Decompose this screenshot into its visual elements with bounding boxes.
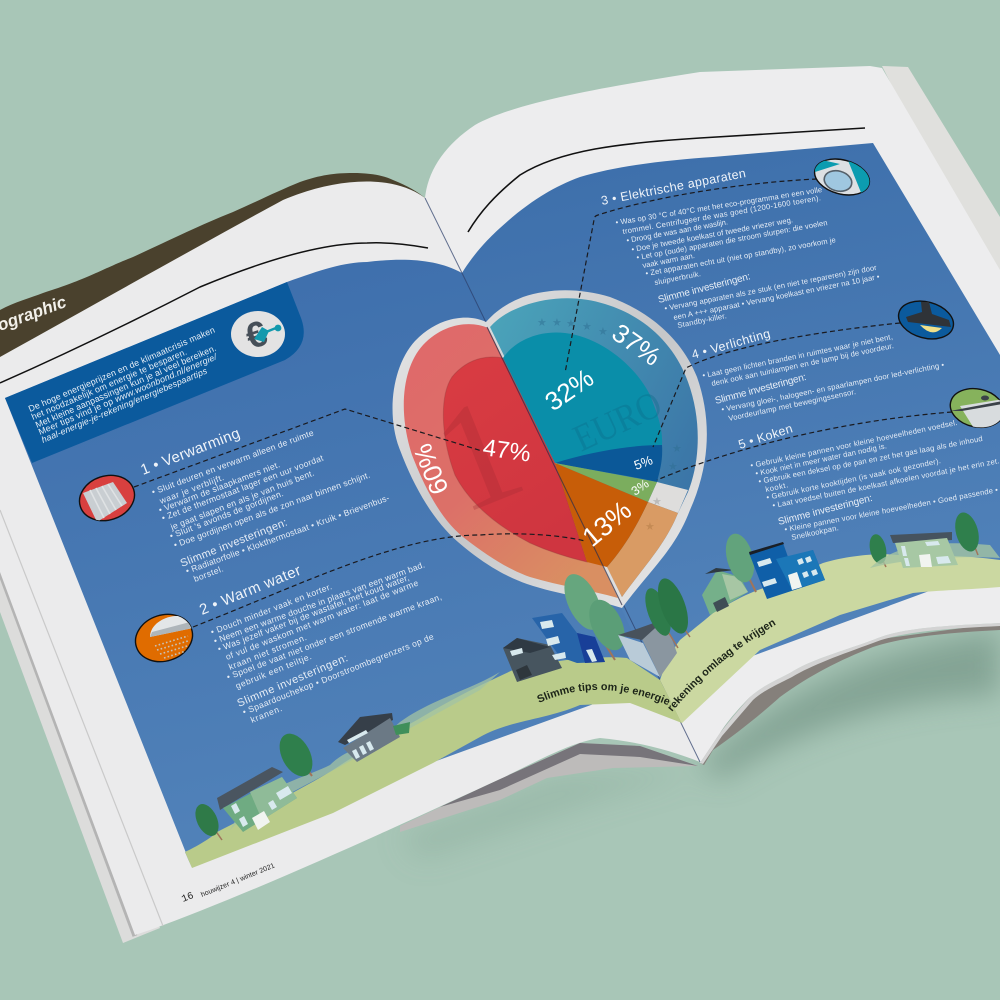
right page xyxy=(425,66,1000,763)
stars and rain watermark xyxy=(537,317,682,533)
icon: cooking pot xyxy=(950,388,1000,428)
stars and rain watermark: ★ xyxy=(668,461,678,473)
ground caption right: rekening omlaag te krijgen xyxy=(668,620,776,712)
slice: 47% red xyxy=(443,357,587,562)
tips text: • Let op (oude) apparaten die stroom slurpen: die voelen xyxy=(636,218,828,262)
tips text: kraan niet stromen. xyxy=(227,632,308,672)
section 2: warm water xyxy=(129,560,443,725)
tips text: • Was op 30 °C of 40°C met het eco-programma en een volle xyxy=(615,185,823,227)
tree small left xyxy=(191,800,223,840)
blue banner panel xyxy=(5,282,304,463)
blue apartment xyxy=(532,613,605,663)
dashed leader: koken xyxy=(657,412,952,480)
slice: 13% orange xyxy=(555,463,648,567)
tips text: een A +++ apparaat • Vervang koelkast en vriezer na 10 jaar • xyxy=(673,272,881,322)
icon: washing machine xyxy=(814,158,870,196)
icon: euro plug xyxy=(231,311,285,357)
tips text: • Sluit 's avonds de gordijnen. xyxy=(168,488,285,541)
tips text: • Gebruik kleine pannen voor kleine hoeveelheden voedsel. xyxy=(750,418,958,470)
tips text: Slimme investeringen: xyxy=(179,517,289,570)
heading: 1 • Verwarming xyxy=(138,425,242,479)
bushes xyxy=(230,672,500,830)
banner intro text: Meer tips vind je op www.woonbond.nl/energie/ xyxy=(37,351,220,437)
tips text: • Was jezelf vaker bij de wastafel, met koud water, xyxy=(216,572,411,654)
heart pie chart xyxy=(393,290,707,608)
section 4: verlichting xyxy=(690,295,958,423)
stars and rain watermark: ★ xyxy=(620,331,630,343)
label 13%: 13% xyxy=(577,495,637,553)
stars and rain watermark: ★ xyxy=(652,496,662,508)
tips text: denk ook aan tuinlampen en de lamp bij de voordeur. xyxy=(711,341,894,388)
tips text: • Spaardouchekop • Doorstroombegrenzers op de xyxy=(241,631,435,717)
tips text: of vul de waskom met warm water: laat de warme xyxy=(224,578,420,662)
heading: 2 • Warm water xyxy=(197,562,303,619)
tips text: kranen. xyxy=(249,703,283,725)
tips text: • Zet de thermostaat lager een uur voordat xyxy=(160,453,325,523)
euro note watermark: 1 xyxy=(412,364,544,546)
tips text: trommel. Centrifugeer de was goed (1200-1600 toeren). xyxy=(622,193,821,236)
dashed leader: elektrische apparaten xyxy=(565,179,817,373)
stars and rain watermark: ★ xyxy=(537,317,547,329)
label 60%: 60% xyxy=(407,439,455,499)
landscape left page xyxy=(191,568,694,840)
right page ground xyxy=(660,554,1000,723)
tips text: • Laat geen lichten branden in ruimtes waar je niet bent, xyxy=(702,332,893,380)
tips text: gebruik een teiltje. xyxy=(234,651,313,691)
stars and rain watermark: ★ xyxy=(645,521,655,533)
heading: 4 • Verlichting xyxy=(690,326,772,362)
left page xyxy=(0,182,700,935)
tips text xyxy=(702,332,945,423)
section 3: elektrische apparaten xyxy=(600,153,881,330)
tips text: Slimme investeringen: xyxy=(657,271,752,306)
tips text: • Gebruik korte kooktijden (is vaak ook gezonder). xyxy=(766,456,942,502)
banner intro text: Met kleine aanpassingen kun je al veel bereiken. xyxy=(34,343,218,430)
tips text: • Radiatorfolie • Klokthermostaat • Kruik • Brievenbus- xyxy=(184,493,391,576)
landscape right page xyxy=(702,510,1000,615)
tree xyxy=(721,530,759,592)
tips text: vaak warm aan. xyxy=(642,251,695,270)
banner intro text: haal-energie-je-rekening/energiebespaartips xyxy=(40,365,209,445)
label 3%: 3% xyxy=(629,477,652,498)
tips text: • Kleine pannen voor kleine hoeveelheden • Goed passende • xyxy=(784,485,999,534)
outer ring right: 37% xyxy=(490,298,698,597)
shadow under magazine xyxy=(400,630,1000,860)
tips text: • Laat voedsel buiten de koelkast afkoelen voordat je het erin zet. xyxy=(772,456,1000,510)
tips text: Slimme investeringen: xyxy=(714,372,808,407)
label 32%: 32% xyxy=(539,362,599,417)
tips text: • Vervang gloei-, halogeen- en spaarlampen door led-verlichting • xyxy=(721,360,945,414)
tips text: • Doe gordijnen open als de zon naar binnen schijnt. xyxy=(172,470,371,550)
section 1: verwarming xyxy=(74,425,391,584)
outer ring left: 60% xyxy=(404,324,618,598)
stars and rain watermark: ★ xyxy=(552,317,562,329)
tips text: • Doe je tweede koelkast of tweede vriezer weg. xyxy=(631,215,794,254)
grey spine house xyxy=(618,619,677,677)
icon: radiator xyxy=(78,474,136,522)
slice: 32% teal xyxy=(503,332,662,463)
heading: 3 • Elektrische apparaten xyxy=(600,166,747,208)
trees centre left xyxy=(557,568,632,660)
house grey left xyxy=(338,713,410,762)
tips text: borstel. xyxy=(192,564,225,584)
stars and rain watermark: ★ xyxy=(566,318,576,330)
blue house xyxy=(749,542,825,599)
banner intro text: De hoge energieprijzen en de klimaatcrisis maken xyxy=(27,325,216,414)
euro note watermark xyxy=(412,364,668,546)
tips text: • Zet apparaten echt uit (niet op standby), zo voorkom je xyxy=(645,235,836,278)
heart silver frame xyxy=(393,290,707,608)
footer page number: 16 xyxy=(180,891,196,906)
olive title band xyxy=(0,173,425,360)
left page black rule xyxy=(0,243,428,383)
back cover stack right xyxy=(882,66,1000,300)
stars and rain watermark: ★ xyxy=(598,326,608,338)
tips text: • Gebruik een deksel op de pan en zet het gas laag als de inhoud xyxy=(758,434,983,486)
section 5: koken xyxy=(737,384,1000,542)
label 37%: 37% xyxy=(607,317,666,372)
tips text: • Droog de was aan de waslijn. xyxy=(626,217,729,245)
slice: 5% blue xyxy=(555,445,662,482)
tips text: • Sluit deuren en verwarm alleen de ruimte xyxy=(150,427,315,497)
dashed leader: verwarming xyxy=(134,409,482,487)
icon: lamp xyxy=(898,300,954,340)
dashed leader: warm water xyxy=(193,534,585,627)
tips text xyxy=(615,185,881,330)
ring segment: orange tan xyxy=(607,502,678,597)
tips text: waar je verblijft. xyxy=(157,472,225,506)
tips text: Slimme investeringen: xyxy=(777,493,874,528)
heading: 5 • Koken xyxy=(737,421,794,452)
tips text: Voordeurlamp met bewegingssensor. xyxy=(728,387,857,423)
tips text xyxy=(209,560,443,725)
tips text: Slimme investeringen: xyxy=(235,652,350,710)
tips text: sluipverbruik. xyxy=(654,269,702,287)
tips text: • Douch minder vaak en korter. xyxy=(209,581,333,637)
banner intro text: het noodzakelijk om energie te besparen. xyxy=(30,347,188,422)
left page blue background xyxy=(5,260,660,868)
right page black rule xyxy=(468,128,865,232)
icon: shower xyxy=(134,614,194,662)
icon: euro plug: € xyxy=(240,312,272,357)
tips text: • Vervang apparaten als ze stuk (en niet te repareren) zijn door xyxy=(664,263,878,313)
green house xyxy=(702,568,748,615)
tips text: • Neem een warme douche in plaats van een warm bad. xyxy=(212,560,426,646)
tips text: je gaat slapen en als je van huis bent. xyxy=(168,468,316,532)
tips text: Snelkookpan. xyxy=(791,523,839,542)
tips text: • Verwarm de slaapkamers niet. xyxy=(157,459,281,515)
tips text: • Spoel de vaat niet onder een stromende warme kraan, xyxy=(225,592,443,682)
tips text: • Kook niet in meer water dan nodig is. xyxy=(755,441,887,478)
dark trees on fold xyxy=(640,575,694,648)
ring segment: grey xyxy=(648,482,688,513)
tree far right xyxy=(951,510,983,555)
tips text xyxy=(150,427,391,584)
dark house xyxy=(503,638,562,682)
footer publication: houwijzer 4 | winter 2021 xyxy=(200,862,276,899)
spine line xyxy=(425,198,700,762)
label 47%: 47% xyxy=(481,434,533,468)
house green left xyxy=(217,767,297,832)
stars and rain watermark: ★ xyxy=(582,321,592,333)
right green house xyxy=(870,532,1000,568)
tree small right xyxy=(867,533,889,567)
tips text: Standby-killer. xyxy=(677,311,727,330)
left page stack xyxy=(0,520,160,943)
lower page block right xyxy=(700,623,1000,765)
tips text: kookt. xyxy=(765,480,789,494)
label 5%: 5% xyxy=(632,452,655,473)
spine fold over heart xyxy=(487,327,622,605)
right page blue background xyxy=(462,143,1000,690)
tips text xyxy=(750,418,1000,542)
lower page block left xyxy=(400,743,698,832)
dashed leader: verlichting xyxy=(653,323,900,447)
left page ground xyxy=(185,657,682,868)
tree left xyxy=(273,728,319,782)
slice: 3% green xyxy=(555,463,657,502)
stars and rain watermark: ★ xyxy=(672,443,682,455)
euro note watermark: EURO xyxy=(567,383,668,460)
ground caption left: Slimme tips om je energie xyxy=(537,682,670,705)
